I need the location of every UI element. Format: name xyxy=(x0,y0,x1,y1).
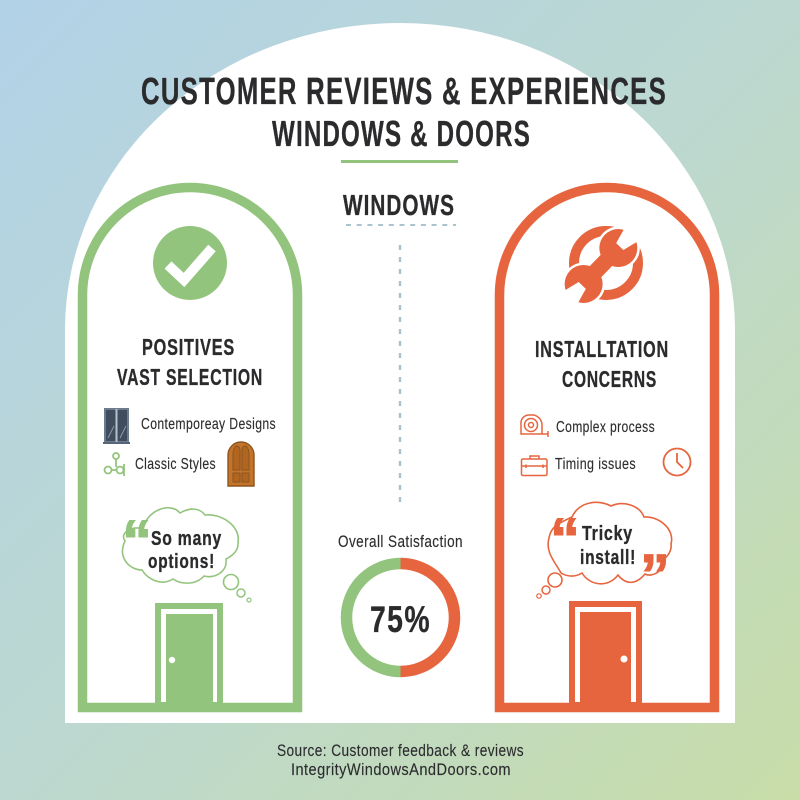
orange arch outline xyxy=(500,187,714,707)
donut chart: 75 percent xyxy=(346,564,454,672)
donut chart: 75 percent: 75% xyxy=(370,599,431,640)
classic styles label: Classic Styles xyxy=(135,456,216,473)
center dashed divider xyxy=(399,245,401,506)
thought bubble: so many options xyxy=(122,508,251,602)
quote text xyxy=(580,523,636,569)
concerns heading: INSTALLTATION xyxy=(535,336,669,362)
source footer: IntegrityWindowsAndDoors.com xyxy=(291,761,511,779)
overall satisfaction label: Overall Satisfaction xyxy=(338,532,463,551)
icon: toolbox xyxy=(522,456,547,476)
icon: green door xyxy=(155,603,223,704)
positives heading: VAST SELECTION xyxy=(117,364,263,390)
concerns heading xyxy=(535,336,669,392)
title: WINDOWS & DOORS xyxy=(272,113,531,154)
icon: tape measure xyxy=(521,415,548,437)
closing quote mark: ” xyxy=(640,543,670,608)
icon: window xyxy=(103,409,130,444)
positives heading xyxy=(117,334,263,390)
icon: arched wooden door xyxy=(228,442,254,486)
panel: installation concerns xyxy=(500,187,714,707)
quote text: options! xyxy=(148,551,215,573)
white arch panel xyxy=(65,23,735,723)
green arch outline xyxy=(82,188,298,707)
heading dashed rule xyxy=(346,224,456,226)
icon: nodes xyxy=(104,453,124,476)
icon: check mark xyxy=(153,226,227,300)
quote mark: “ xyxy=(122,509,152,574)
source footer: Source: Customer feedback & reviews xyxy=(277,742,524,760)
icon: orange door xyxy=(569,601,642,704)
contemporary designs label: Contemporeay Designs xyxy=(141,416,276,433)
panel: positives xyxy=(82,188,298,707)
quote text: Tricky xyxy=(582,523,633,545)
section heading: windows: WINDOWS xyxy=(343,190,455,222)
timing issues label: Timing issues xyxy=(555,456,636,473)
source footer xyxy=(277,742,524,779)
title underline xyxy=(341,160,458,163)
positives heading: POSITIVES xyxy=(142,334,235,360)
quote text xyxy=(148,528,222,573)
concerns heading: CONCERNS xyxy=(562,366,657,392)
thought bubble: tricky install xyxy=(537,502,672,608)
opening quote mark: “ xyxy=(550,507,580,572)
title xyxy=(141,71,667,154)
quote text: install! xyxy=(580,547,636,569)
quote text: So many xyxy=(151,528,222,550)
complex process label: Complex process xyxy=(556,419,655,436)
icon: wrench in ring xyxy=(553,217,649,315)
icon: clock xyxy=(664,448,690,476)
